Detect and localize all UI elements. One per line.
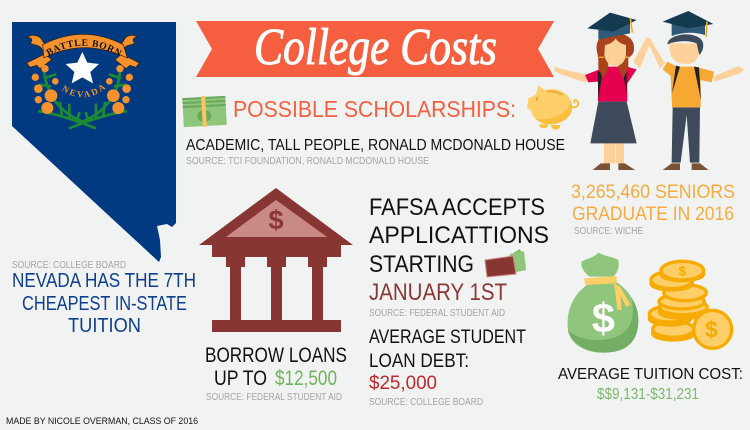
average debt text: LOAN DEBT:: [369, 350, 469, 372]
credit line: MADE BY NICOLE OVERMAN, CLASS OF 2016: [6, 416, 198, 427]
icon: bank building: [199, 188, 353, 332]
debt source: SOURCE: COLLEGE BOARD: [369, 397, 483, 408]
loans source: SOURCE: FEDERAL STUDENT AID: [206, 392, 342, 403]
seniors statistic: 3,265,460 SENIORS: [571, 181, 735, 203]
FAFSA text: FAFSA ACCEPTS: [369, 194, 545, 221]
icon: bank building: $: [268, 205, 284, 235]
scholarship source: SOURCE: TCI FOUNDATION, RONALD MCDONALD HOUSE: [186, 156, 429, 167]
map source: SOURCE: COLLEGE BOARD: [12, 260, 126, 271]
average debt text: AVERAGE STUDENT: [369, 326, 526, 348]
state seal: [26, 34, 140, 130]
average debt text: [369, 326, 526, 394]
heading: possible scholarships: POSSIBLE SCHOLARSHIPS:: [233, 96, 516, 122]
loans text: [205, 344, 347, 390]
tuition cost text: [558, 366, 743, 403]
tuition cost text: $$9,131-$31,231: [597, 386, 699, 403]
wreath: [32, 65, 133, 128]
icon: piggy bank: [527, 86, 578, 130]
seniors statistic: GRADUATE IN 2016: [572, 203, 734, 225]
title banner: College Costs: [254, 19, 497, 76]
loans text: UP TO: [214, 367, 267, 390]
icon: cash stack: [182, 95, 227, 128]
icon: money bag: $: [592, 295, 615, 342]
scholarship list: ACADEMIC, TALL PEOPLE, RONALD MCDONALD HOUSE: [186, 137, 565, 154]
average debt text: $25,000: [369, 372, 437, 394]
ribbon: BATTLE BORN: [46, 39, 122, 56]
icon: gold coins: [649, 261, 732, 348]
FAFSA text: JANUARY 1ST: [369, 279, 507, 306]
Nevada fact: CHEAPEST IN-STATE: [22, 293, 187, 315]
icon: wallet and cash: [485, 249, 526, 277]
icon: graduates: [554, 11, 745, 170]
Nevada fact: TUITION: [68, 315, 141, 337]
icon: money bag: [568, 253, 638, 353]
NEVADA lettering: NEVADA: [62, 84, 106, 98]
loans text: BORROW LOANS: [205, 344, 347, 367]
Nevada state shape: [12, 22, 176, 262]
FAFSA source: SOURCE: FEDERAL STUDENT AID: [369, 308, 505, 319]
seniors source: SOURCE: WICHE: [574, 226, 643, 237]
panel: Nevada map with seal: [12, 22, 196, 337]
tuition cost text: AVERAGE TUITION COST:: [558, 366, 743, 383]
FAFSA text: APPLICATTIONS: [369, 222, 549, 249]
star: [66, 52, 99, 83]
boy graduate: [647, 11, 745, 170]
icon: gold coins: $: [679, 263, 687, 278]
FAFSA text: STARTING: [369, 251, 474, 278]
loans text: $12,500: [275, 367, 337, 390]
Nevada fact: NEVADA HAS THE 7TH: [12, 270, 196, 292]
icon: gold coins: $: [705, 316, 718, 342]
Nevada fact: [12, 270, 196, 337]
seniors statistic: [571, 181, 735, 225]
FAFSA text: [369, 194, 549, 306]
girl graduate: [554, 13, 652, 170]
